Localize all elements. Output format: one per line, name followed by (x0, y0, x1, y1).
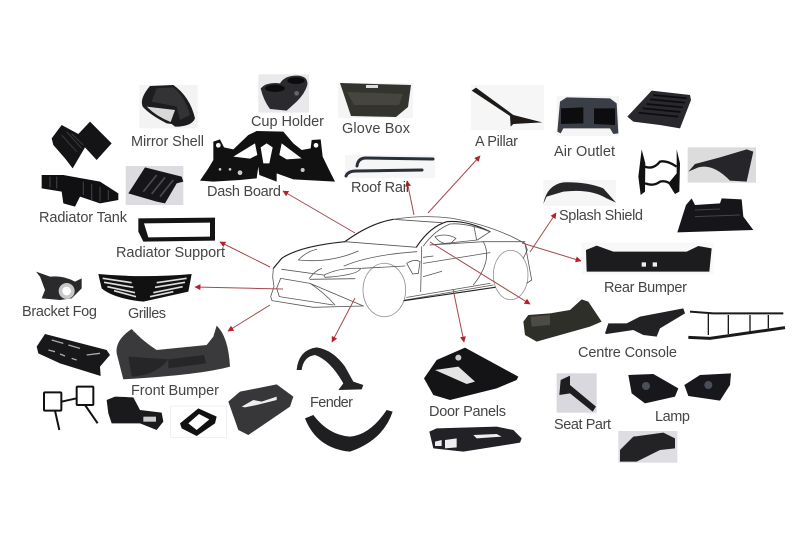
part: dash crossbar (688, 312, 785, 338)
label: Radiator Tank: Radiator Tank (39, 210, 128, 226)
label: Dash Board: Dash Board (207, 184, 281, 200)
label: Centre Console: Centre Console (578, 345, 677, 361)
label: Fender: Fender (310, 395, 353, 411)
label: Glove Box: Glove Box (342, 121, 411, 137)
part: dash board (200, 131, 335, 182)
part: glove box (338, 83, 413, 118)
part: framed trim piece (171, 406, 227, 437)
label: Seat Part: Seat Part (554, 417, 611, 433)
part: bumper bracket (37, 334, 110, 376)
label: Roof Rail: Roof Rail (351, 180, 409, 196)
part: lamps (628, 373, 731, 403)
part: radiator support (138, 218, 215, 242)
label: Rear Bumper: Rear Bumper (604, 280, 687, 296)
label: Mirror Shell: Mirror Shell (131, 134, 204, 150)
part: mirror brackets (44, 387, 98, 430)
label: Lamp: Lamp (655, 409, 690, 425)
part: centre console (523, 299, 602, 342)
part: console rail (605, 308, 685, 337)
part: shifter cover (228, 384, 293, 435)
part: grilles (98, 274, 192, 302)
label: Air Outlet: Air Outlet (554, 144, 615, 160)
part: air outlet (557, 96, 619, 136)
part: splash shield (543, 180, 616, 206)
part: fender (297, 347, 363, 390)
part: louvered panel (627, 91, 691, 128)
label: Grilles: Grilles (128, 306, 166, 322)
part: mirror shell (139, 85, 198, 128)
label: Bracket Fog: Bracket Fog (22, 304, 97, 320)
part: seat part (557, 373, 597, 413)
part: a pillar (471, 85, 544, 130)
part: bracket fog (36, 272, 82, 300)
part: dashboard frame (638, 149, 680, 195)
part: door handle trim (429, 427, 522, 452)
label: Door Panels: Door Panels (429, 404, 506, 420)
car outline drawing (271, 217, 532, 317)
part: door panel (424, 348, 518, 400)
label: A Pillar: A Pillar (475, 134, 518, 150)
part: rear bumper (582, 243, 713, 274)
part: fender flare (305, 410, 393, 452)
arrows from car to part groups (195, 156, 581, 342)
part: box trim (677, 198, 753, 232)
part: roof rail (345, 155, 435, 178)
label: Splash Shield: Splash Shield (559, 208, 643, 224)
part: seat console (107, 397, 163, 430)
label: Radiator Support: Radiator Support (116, 245, 225, 261)
part: radiator tank pieces (42, 122, 183, 207)
label: Front Bumper: Front Bumper (131, 383, 219, 399)
label: Cup Holder: Cup Holder (251, 114, 324, 130)
part: front bumper (117, 326, 230, 379)
part: lamp bracket (618, 431, 677, 463)
part: trim panel (688, 147, 756, 183)
part: cup holder (258, 74, 309, 113)
